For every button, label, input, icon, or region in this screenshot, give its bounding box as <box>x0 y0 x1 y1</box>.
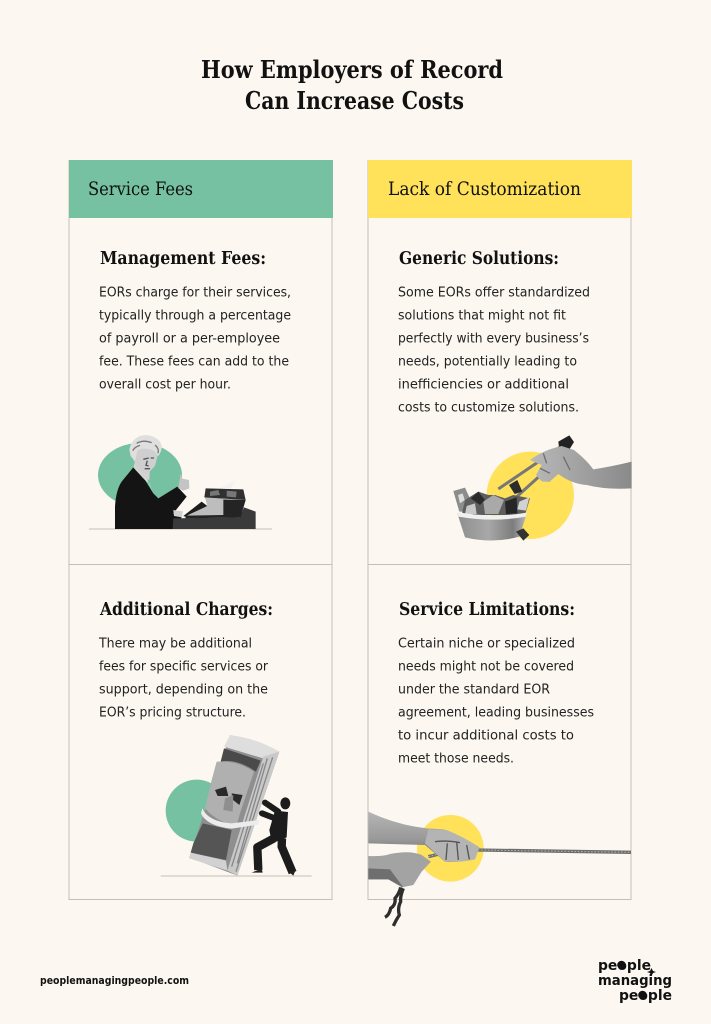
title: Can Increase Costs <box>245 86 464 115</box>
block: service limitations <box>398 600 594 766</box>
block: additional charges: fees for specific services or <box>99 660 269 674</box>
icon: hands pulling rope <box>368 812 631 926</box>
title: How Employers of Record <box>201 55 503 84</box>
block: management fees: of payroll or a per-employee <box>99 332 280 346</box>
icon: chopsticks picking letters from bowl <box>453 435 632 541</box>
block: management fees: typically through a percentage <box>99 308 291 324</box>
block: generic solutions: Generic Solutions: <box>399 249 559 269</box>
logo: managing <box>598 973 672 989</box>
block: generic solutions: inefficiencies or additional <box>398 378 569 392</box>
panel: lack of customization <box>368 160 632 900</box>
block: additional charges <box>98 600 273 720</box>
header: service fees: Service Fees <box>88 179 193 200</box>
block: management fees: fee. These fees can add to the <box>99 354 289 370</box>
block: generic solutions: perfectly with every business’s <box>398 332 589 346</box>
block: management fees: overall cost per hour. <box>99 378 231 392</box>
header: service fees <box>69 160 333 218</box>
block: management fees: EORs charge for their services, <box>99 286 291 300</box>
block: additional charges: Additional Charges: <box>99 600 273 620</box>
block: service limitations: needs might not be covered <box>398 660 574 674</box>
block: service limitations: agreement, leading businesses <box>398 706 594 720</box>
icon: man pushing rolled banknote <box>161 735 312 876</box>
block: management fees <box>99 249 291 392</box>
icon: statue man at typewriter <box>89 435 272 529</box>
block: service limitations: under the standard EOR <box>398 682 550 698</box>
block: generic solutions: costs to customize solutions. <box>398 400 579 416</box>
block: additional charges: EOR’s pricing structure. <box>99 706 246 720</box>
header: lack of customization <box>368 160 632 218</box>
footer url: peoplemanagingpeople.com <box>40 974 189 987</box>
block: generic solutions: solutions that might not fit <box>398 308 566 324</box>
logo <box>598 958 672 1004</box>
block: generic solutions <box>398 249 590 416</box>
panel: service fees <box>69 160 333 900</box>
block: generic solutions: needs, potentially leading to <box>398 354 577 370</box>
block: service limitations: Service Limitations: <box>399 600 575 620</box>
title <box>201 55 503 115</box>
block: additional charges: support, depending on the <box>99 682 268 698</box>
header: lack of customization: Lack of Customization <box>388 179 581 200</box>
block: service limitations: Certain niche or specialized <box>398 636 575 652</box>
block: generic solutions: Some EORs offer standardized <box>398 286 590 300</box>
block: service limitations: to incur additional costs to <box>398 728 574 744</box>
block: management fees: Management Fees: <box>100 249 266 269</box>
block: additional charges: There may be additional <box>98 636 252 652</box>
block: service limitations: meet those needs. <box>398 752 514 766</box>
logo: people <box>619 988 672 1004</box>
logo: people <box>598 958 651 974</box>
